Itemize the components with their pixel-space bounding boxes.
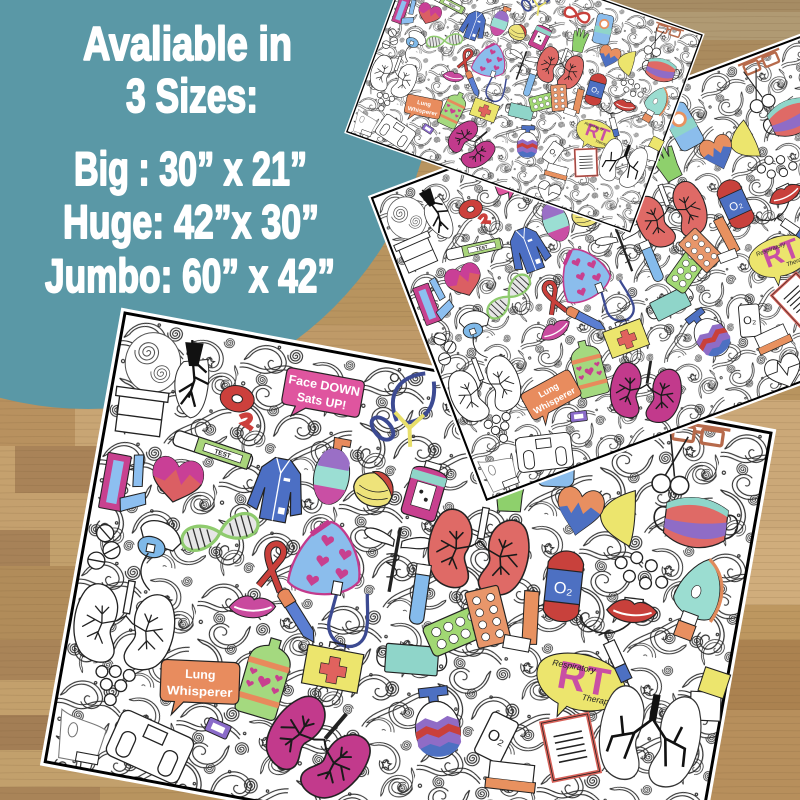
hand pump — [130, 518, 184, 594]
speech bubble: RT: Therapy — [581, 692, 614, 708]
outline pills — [86, 523, 124, 573]
title: available sizes: Avaliable in — [83, 17, 292, 70]
speech bubble: RT: Respiratory — [552, 657, 597, 675]
green blister pack — [422, 603, 492, 658]
orange inhaler — [503, 587, 546, 653]
title: available sizes: Jumbo: 60” x 42” — [45, 249, 335, 302]
speech bubble: RT — [530, 647, 630, 728]
DNA helix — [179, 510, 261, 554]
heart — [148, 454, 206, 507]
blue syringe — [598, 630, 640, 698]
speech bubble: lung whisperer: Lung — [185, 667, 216, 682]
orange glasses — [666, 421, 730, 447]
teal nebulizer mask — [661, 552, 733, 646]
blue stethoscope tubing — [323, 581, 374, 649]
red ribbon — [258, 542, 288, 592]
blue test tube — [409, 564, 431, 625]
blue face mask with hearts — [287, 516, 368, 601]
poster sheet: big — [344, 0, 707, 235]
purple pulse tag — [204, 717, 232, 740]
oxygen cylinder — [541, 549, 647, 637]
red bow icon — [466, 417, 524, 447]
orange bar — [485, 760, 537, 793]
speech bubble: face down sats up: Face DOWN — [288, 372, 361, 399]
title: available sizes: Big : 30” x 21” — [74, 142, 307, 195]
thermometer — [276, 587, 319, 646]
outline flower brain — [121, 328, 185, 397]
O2 icon — [216, 383, 260, 429]
red lungs — [422, 499, 535, 600]
orange and blue heart — [552, 484, 606, 539]
black bronchi with outline lungs — [592, 682, 707, 792]
outline heart monitor — [472, 798, 530, 800]
yellow oxygen mask — [351, 468, 396, 510]
clipboard — [541, 714, 600, 781]
egg humidifier — [410, 685, 464, 761]
title: available sizes: 3 Sizes: — [126, 69, 258, 122]
red lips — [605, 596, 658, 627]
orange blister pack — [465, 585, 512, 649]
caduceus outline — [355, 521, 434, 598]
molecule outline — [612, 548, 672, 593]
speech bubble: lung whisperer — [159, 659, 240, 718]
yellow drop mask — [596, 485, 640, 547]
iv bag — [473, 711, 519, 764]
oxygen humidifier vase — [309, 435, 356, 507]
speech bubble: face down sats up — [279, 367, 365, 428]
black bronchi tree — [169, 338, 216, 420]
speech bubble: face down sats up: Sats UP! — [296, 390, 347, 413]
lab coat — [245, 454, 310, 526]
outline bottle with yellow top — [690, 666, 731, 722]
striped face mask — [651, 493, 740, 553]
stethoscope — [369, 365, 437, 449]
outline scissors — [651, 431, 698, 497]
title: available sizes: Huge: 42”x 30” — [63, 195, 319, 248]
inhaler book — [98, 448, 154, 516]
green glove — [494, 460, 529, 512]
poster sheet: huge — [368, 30, 800, 504]
outline specimen container — [111, 386, 169, 437]
pink medicine bottle — [400, 457, 450, 523]
blue inhaler with orange circle — [537, 421, 576, 487]
first aid kit — [301, 638, 365, 693]
molecule balls — [91, 662, 136, 709]
oxygen cylinder: O₂ — [553, 579, 574, 599]
magenta lungs — [253, 682, 385, 800]
outline pillow with stars — [53, 709, 108, 765]
speech bubble: RT: RT — [554, 653, 613, 705]
title: available sizes — [45, 17, 335, 302]
pink lips — [228, 592, 277, 622]
test tube labelled test — [172, 430, 254, 470]
iv bag: O₂ — [484, 726, 508, 749]
outline lungs — [68, 572, 181, 675]
teal circle banner — [0, 0, 436, 409]
green bottle with hearts — [234, 633, 296, 721]
outline weight scale — [104, 708, 196, 786]
teal face mask — [376, 643, 448, 677]
speech bubble: lung whisperer: Whisperer — [167, 683, 233, 700]
test tube labelled test: TEST — [213, 448, 231, 460]
